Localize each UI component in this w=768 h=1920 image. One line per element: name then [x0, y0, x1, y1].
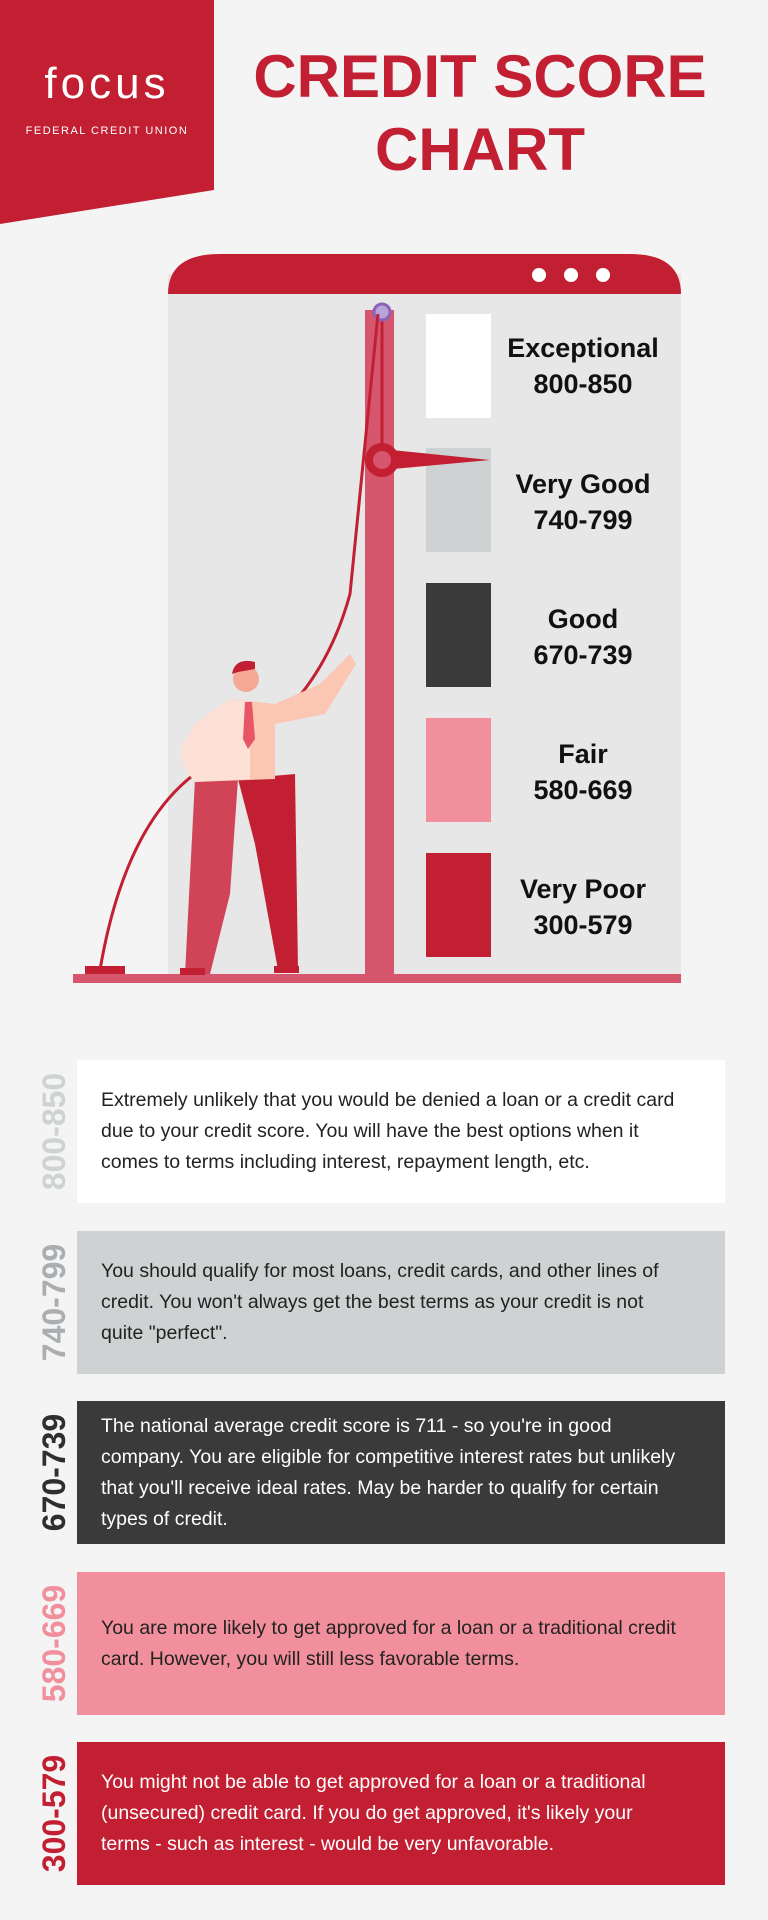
title: CREDIT SCORE	[253, 43, 707, 110]
flag pointer	[365, 443, 490, 477]
label: good: Good	[548, 604, 618, 634]
card 580-669	[77, 1572, 725, 1715]
card 740-799	[77, 1231, 725, 1374]
range label 670-739: 670-739	[36, 1414, 72, 1531]
title: CHART	[375, 116, 585, 183]
card 300-579: You might not be able to get approved for a loan or a traditional (unsecured) credit card. If you do get approved, it's likely your terms - such as interest - would be very unfavorable.	[101, 1771, 646, 1855]
label: exceptional: Exceptional	[507, 333, 659, 363]
label: exceptional: 800-850	[533, 369, 633, 399]
label: very good: 740-799	[533, 505, 633, 535]
title	[253, 43, 707, 183]
logo block	[0, 0, 214, 224]
range label 740-799: 740-799	[36, 1244, 72, 1361]
logo text: focus	[44, 59, 170, 108]
label: very poor: 300-579	[533, 910, 633, 940]
label: very poor	[520, 874, 646, 940]
label: good: 670-739	[533, 640, 633, 670]
card 300-579	[77, 1742, 725, 1885]
rope	[100, 314, 378, 970]
label: fair: Fair	[558, 739, 608, 769]
swatch: exceptional	[426, 314, 491, 418]
range label 300-579: 300-579	[36, 1755, 72, 1872]
swatch: very poor	[426, 853, 491, 957]
label: good	[533, 604, 633, 670]
chart window	[73, 254, 681, 983]
swatch: fair	[426, 718, 491, 822]
man	[185, 779, 238, 974]
label: very good: Very Good	[515, 469, 651, 499]
label: exceptional	[507, 333, 659, 399]
swatch: very good	[426, 448, 491, 552]
swatch: good	[426, 583, 491, 687]
card 740-799: You should qualify for most loans, credit cards, and other lines of credit. You won't always get the best terms as your credit is not quite "perfect".	[101, 1260, 659, 1344]
label: very good	[515, 469, 651, 535]
label: fair	[533, 739, 633, 805]
card 800-850: Extremely unlikely that you would be denied a loan or a credit card due to your credit score. You will have the best options when it comes to terms including interest, repayment length, etc.	[101, 1089, 674, 1173]
card 670-739: The national average credit score is 711 - so you're in good company. You are eligible for competitive interest rates but unlikely that you'll receive ideal rates. May be harder to qualify for certain types of credit.	[101, 1414, 675, 1530]
label: fair: 580-669	[533, 775, 633, 805]
label: very poor: Very Poor	[520, 874, 646, 904]
range label 800-850: 800-850	[36, 1073, 72, 1190]
card 800-850	[77, 1060, 725, 1203]
range label 580-669: 580-669	[36, 1585, 72, 1702]
logo subtitle: FEDERAL CREDIT UNION	[26, 125, 188, 137]
card 580-669: You are more likely to get approved for a loan or a traditional credit card. However, you will still less favorable terms.	[101, 1616, 676, 1670]
